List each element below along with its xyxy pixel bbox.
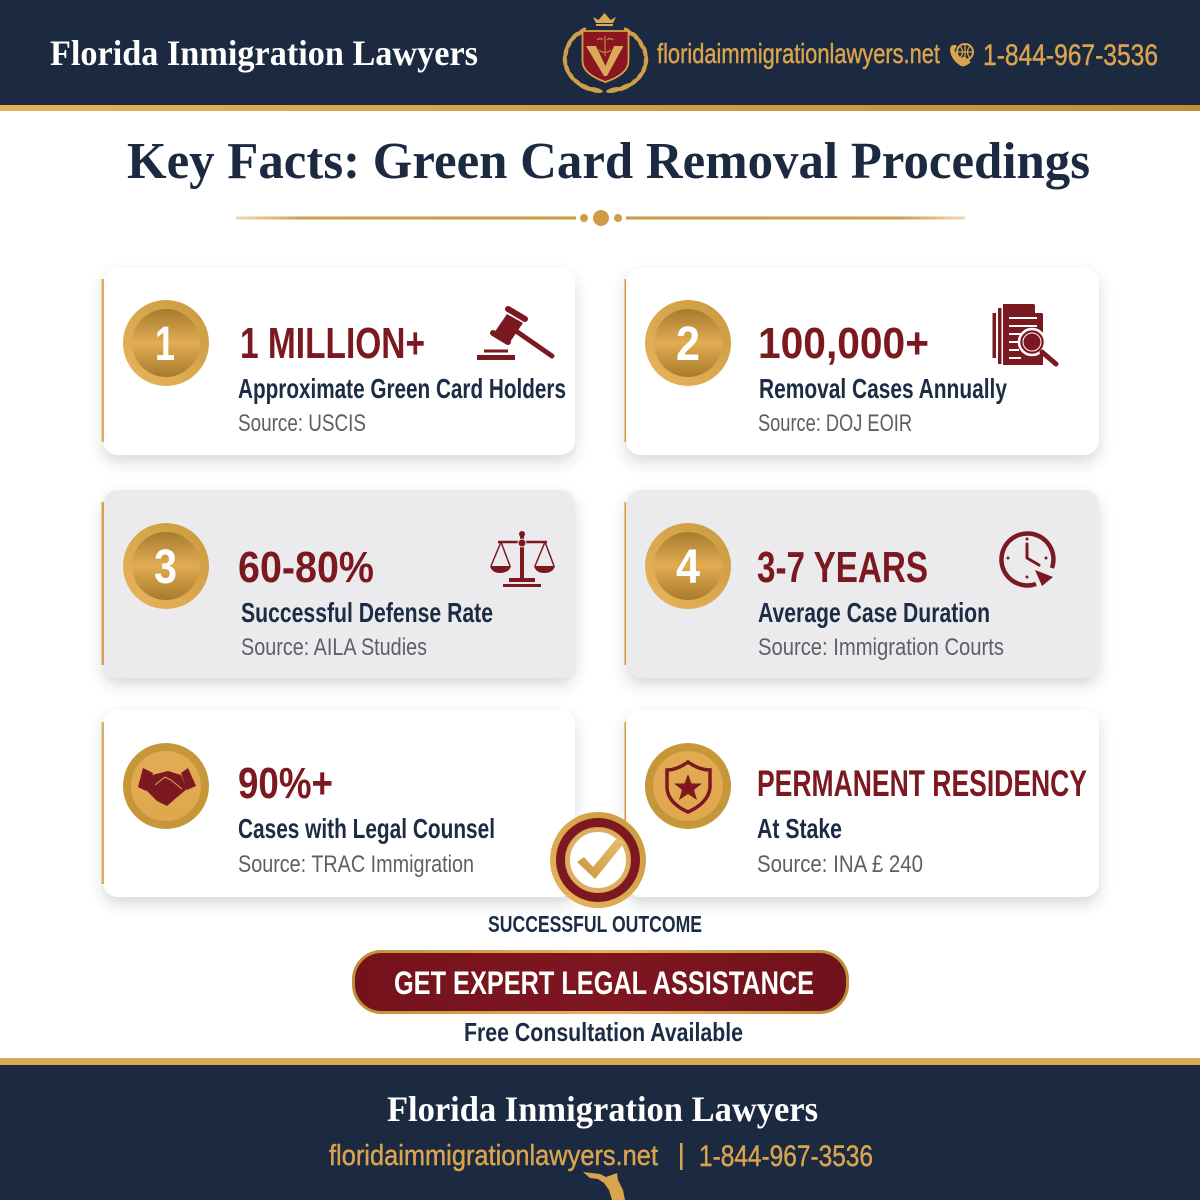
- title: Key Facts: Green Card Removal Procedings: [127, 133, 1090, 190]
- stat: 3-7 YEARS: [757, 543, 928, 592]
- icon: document search: [992, 304, 1056, 365]
- source: Source: DOJ EOIR: [758, 410, 912, 437]
- footer separator: [680, 1143, 682, 1170]
- description: Average Case Duration: [758, 597, 990, 628]
- panel: permanent residency at stake: [624, 710, 1099, 897]
- icon: handshake badge: [123, 743, 209, 829]
- outcome label: SUCCESSFUL OUTCOME: [488, 911, 702, 937]
- header firm name: Florida Inmigration Lawyers: [50, 33, 478, 73]
- source: Source: AILA Studies: [241, 634, 427, 661]
- number badge 2: [645, 300, 731, 386]
- stat: 90%+: [238, 759, 333, 808]
- header phone number: 1-844-967-3536: [983, 39, 1158, 72]
- number badge 4: 4: [676, 541, 700, 594]
- stat: 100,000+: [758, 319, 929, 368]
- number badge 1: 1: [155, 318, 175, 371]
- description: Cases with Legal Counsel: [238, 813, 495, 844]
- footer firm name: Florida Inmigration Lawyers: [387, 1089, 818, 1129]
- icon: shield badge: [645, 743, 731, 829]
- number badge 2: 2: [676, 318, 700, 371]
- number badge 4: [645, 523, 731, 609]
- icon: scales of justice: [490, 531, 555, 587]
- panel: 3-7 years case duration: [624, 490, 1099, 678]
- description: Successful Defense Rate: [241, 597, 493, 628]
- call-to-action button: GET EXPERT LEGAL ASSISTANCE: [394, 965, 814, 1001]
- panel: 100,000 removal cases: [624, 268, 1099, 455]
- footer band: [0, 1058, 1200, 1200]
- footer phone number: 1-844-967-3536: [699, 1140, 873, 1173]
- header website: floridaimmigrationlawyers.net: [657, 38, 940, 69]
- number badge 3: 3: [154, 541, 177, 594]
- number badge 1: [123, 300, 209, 386]
- call-to-action button: [354, 952, 848, 1012]
- description: Approximate Green Card Holders: [238, 373, 566, 404]
- crest logo: [562, 13, 649, 94]
- icon: clock: [1001, 533, 1053, 586]
- header band: [0, 0, 1200, 111]
- panel: 90% with legal counsel: [102, 710, 575, 897]
- description: Removal Cases Annually: [759, 373, 1007, 404]
- title divider ornament: [236, 210, 965, 226]
- stat: 60-80%: [238, 543, 374, 592]
- source: Source: TRAC Immigration: [238, 851, 474, 878]
- description: At Stake: [757, 813, 842, 844]
- panel: 1 million green card holders: [102, 268, 575, 455]
- icon: successful outcome check badge: [550, 812, 646, 908]
- source: Source: Immigration Courts: [758, 634, 1004, 661]
- source: Source: USCIS: [238, 410, 366, 437]
- stat: 1 MILLION+: [240, 319, 425, 368]
- icon: phone and globe: [950, 44, 973, 66]
- source: Source: INA £ 240: [757, 851, 923, 878]
- icon: Florida map: [583, 1172, 625, 1200]
- number badge 3: [123, 523, 209, 609]
- consultation note: Free Consultation Available: [464, 1017, 743, 1047]
- icon: gavel: [477, 309, 552, 360]
- footer website: floridaimmigrationlawyers.net: [329, 1140, 658, 1172]
- panel: 60-80% defense rate: [102, 490, 575, 678]
